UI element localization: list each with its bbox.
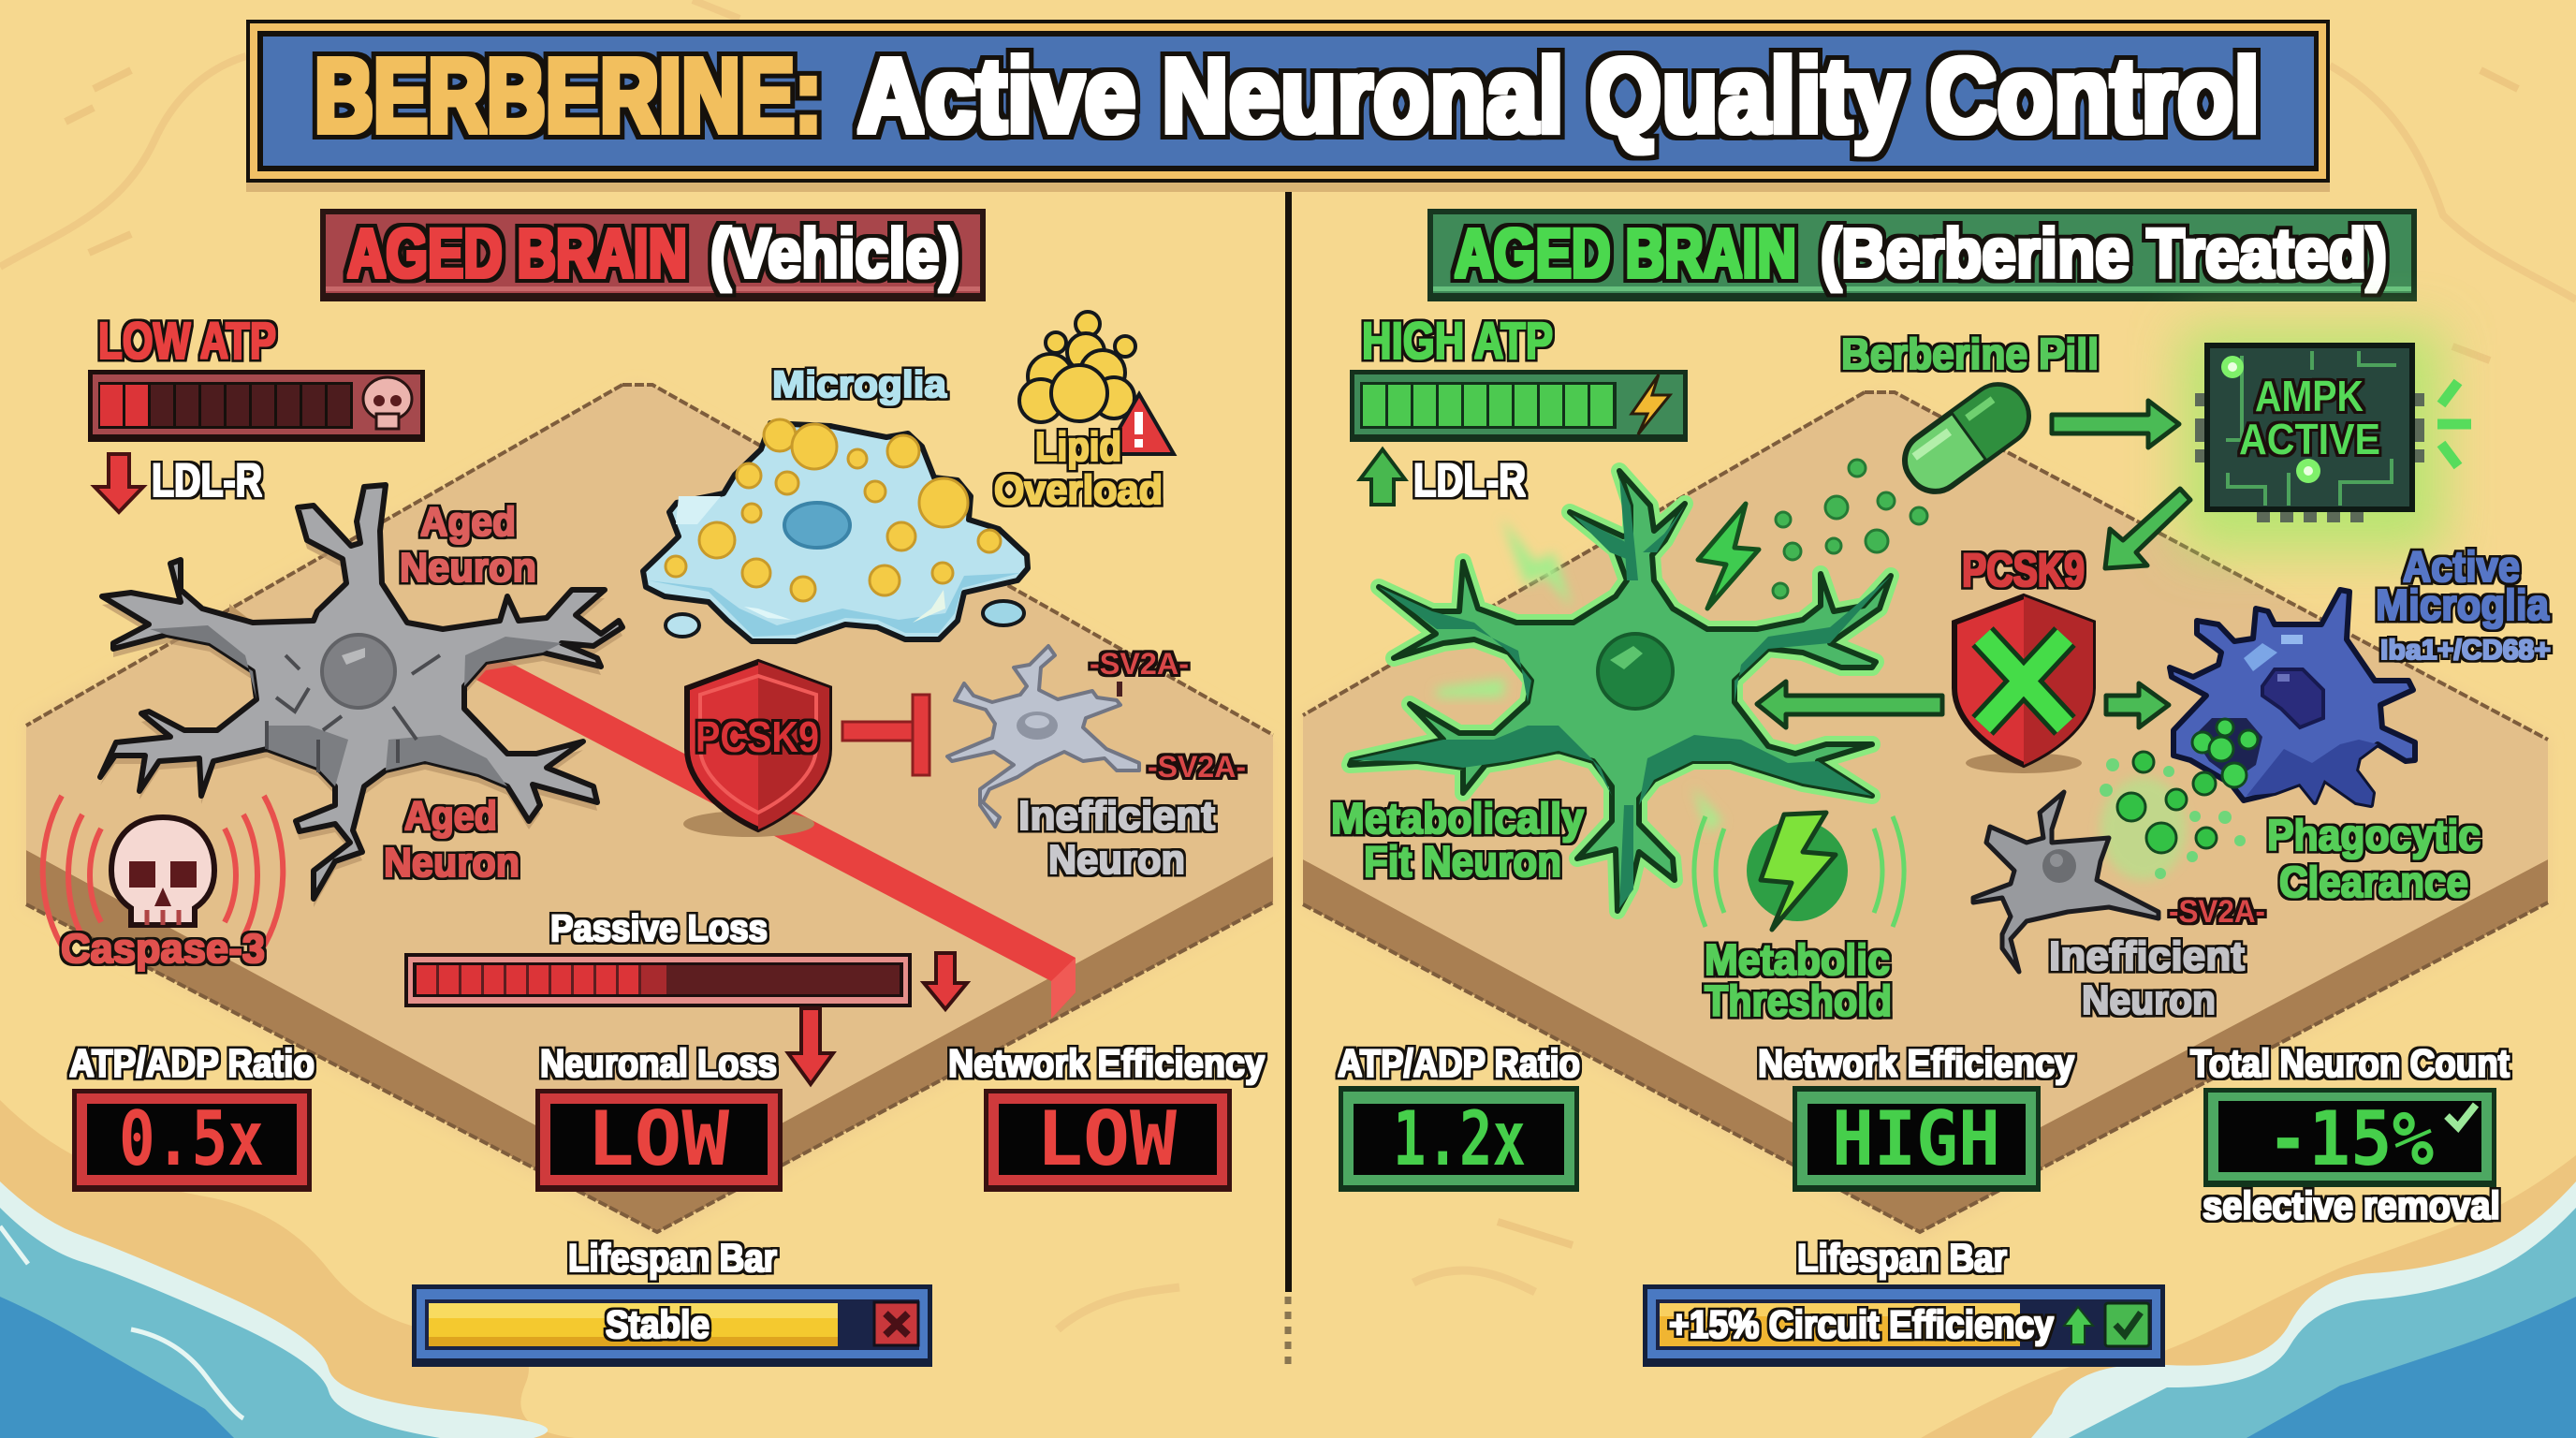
right section header <box>1427 209 2417 301</box>
metric: ATP/ADP right <box>1338 1041 1580 1192</box>
metabolic threshold label: Metabolic <box>1705 935 1890 984</box>
metric: total neuron count: Total Neuron Count <box>2190 1041 2510 1085</box>
active blue microglia <box>2170 590 2415 805</box>
right isometric platform <box>1303 392 2548 1238</box>
arrow: passive loss down <box>924 953 967 1009</box>
arrow: pill to AMPK <box>2052 401 2179 448</box>
icon: PCSK9 shield left: PCSK9 <box>695 712 819 761</box>
berberine pill label: Berberine Pill <box>1841 330 2099 378</box>
AMPK glow <box>2181 328 2443 552</box>
inefficient neuron left <box>947 646 1139 827</box>
left isometric platform <box>26 385 1273 1238</box>
high ATP label: HIGH ATP <box>1362 311 1553 370</box>
title banner: BERBERINE: <box>315 37 822 154</box>
icon: warning triangle <box>1105 394 1174 454</box>
lipid overload label: Overload <box>994 467 1163 513</box>
active microglia label <box>2376 542 2551 666</box>
icon: bolt <box>1632 374 1670 434</box>
metric: ATP/ADP right: 1.2x <box>1393 1095 1526 1182</box>
inefficient neuron label left: Neuron <box>1048 837 1185 883</box>
lipid overload label: Lipid <box>1035 424 1121 470</box>
arrow: up <box>2064 1307 2093 1344</box>
inefficient neuron label left: Inefficient <box>1018 793 1215 839</box>
lifespan bar right <box>1643 1236 2165 1367</box>
aged neuron label bottom: Aged <box>404 793 497 839</box>
phagocytic clearance label: Phagocytic <box>2267 811 2481 859</box>
lipid-laden microglia <box>643 419 1028 641</box>
microglia label: Microglia <box>772 364 947 405</box>
low ATP bar <box>88 370 425 442</box>
inefficient neuron right <box>1973 792 2159 972</box>
metric: total neuron count <box>2190 1041 2510 1187</box>
ocean right <box>2031 1181 2576 1438</box>
icon: AMPK chip: ACTIVE <box>2239 415 2380 463</box>
icon: AMPK chip: AMPK <box>2255 372 2364 420</box>
inhibition bar <box>842 695 929 775</box>
phagocytic clearance label: Clearance <box>2279 858 2468 906</box>
phagocytic clearance label <box>2267 811 2481 906</box>
icon: PCSK9 shield crossed <box>1954 596 2093 773</box>
SV2A label right: -SV2A- <box>2169 894 2265 930</box>
arrow: neuronal loss down <box>788 1008 833 1084</box>
aged neuron label top: Neuron <box>400 545 536 591</box>
passive loss label: Passive Loss <box>550 908 768 949</box>
icon: berberine pill <box>1894 374 2040 503</box>
metabolically fit label: Fit Neuron <box>1364 837 1561 886</box>
arrow: AMPK to PCSK9 <box>2105 489 2190 568</box>
icon: green bolt <box>1698 504 1759 609</box>
metric: total neuron count: -15% <box>2267 1095 2434 1182</box>
phagocytic particles <box>2100 752 2246 879</box>
icon: AMPK chip <box>2195 345 2424 522</box>
SV2A top label: -SV2A- <box>1090 647 1189 681</box>
metric: network efficiency left: LOW <box>1036 1095 1178 1182</box>
caspase-3 label: Caspase-3 <box>61 926 265 972</box>
wet sand left <box>0 1100 575 1438</box>
arrow: PCSK9 to microglia <box>2106 683 2169 727</box>
icon: metabolic threshold <box>1694 813 1904 930</box>
metric: ATP/ADP right: ATP/ADP Ratio <box>1338 1041 1580 1085</box>
left section header <box>320 209 986 301</box>
lifespan bar left: Stable <box>606 1302 710 1346</box>
metric: neuronal loss <box>535 1041 783 1192</box>
metric: network efficiency right: HIGH <box>1832 1095 2000 1182</box>
inefficient neuron label right: Inefficient <box>2049 933 2245 979</box>
lipid overload label <box>994 424 1163 513</box>
lifespan bar right: +15% Circuit Efficiency <box>1669 1302 2055 1346</box>
inefficient neuron label right <box>2049 933 2245 1023</box>
metric: ATP/ADP left: ATP/ADP Ratio <box>69 1041 315 1085</box>
LDL-R label left: LDL-R <box>152 454 262 506</box>
LDL-R label right: LDL-R <box>1413 454 1526 506</box>
icon: caspase skull with waves <box>43 796 283 955</box>
aged neuron label top <box>400 499 536 591</box>
metabolic threshold label: Threshold <box>1705 976 1892 1025</box>
icon: check mark <box>2447 1105 2476 1127</box>
metric: neuronal loss: LOW <box>587 1095 730 1182</box>
drug particles <box>1773 460 1927 598</box>
metabolically fit label <box>1331 794 1584 886</box>
passive loss bar <box>404 953 912 1007</box>
arrow: LDL-R down left <box>95 454 143 512</box>
arrow: LDL-R up right <box>1360 449 1405 505</box>
left section header: AGED BRAIN <box>347 214 687 292</box>
aged neuron label top: Aged <box>420 499 516 545</box>
lifespan bar left: Lifespan Bar <box>568 1236 777 1280</box>
PCSK9 label right: PCSK9 <box>1962 544 2085 596</box>
icon: check box <box>2105 1303 2149 1346</box>
icon: small skull <box>363 377 412 429</box>
inefficient neuron label right: Neuron <box>2082 977 2216 1023</box>
phagocytic glow <box>2100 777 2187 880</box>
active microglia label: Microglia <box>2376 580 2549 629</box>
red axon band <box>473 655 1076 1019</box>
icon: signal ticks <box>2437 382 2471 466</box>
metric: network efficiency right: Network Efficiency <box>1758 1041 2075 1085</box>
lifespan bar left <box>412 1236 932 1367</box>
ocean left <box>0 1181 548 1438</box>
metric: ATP/ADP left <box>69 1041 315 1192</box>
right section header: AGED BRAIN <box>1455 214 1796 292</box>
metric: network efficiency right <box>1758 1041 2075 1192</box>
icon: PCSK9 shield left <box>683 662 829 837</box>
low ATP label: LOW ATP <box>98 311 276 370</box>
metric: neuronal loss: Neuronal Loss <box>540 1041 777 1085</box>
right section header: (Berberine Treated) <box>1821 214 2387 292</box>
lifespan bar right: Lifespan Bar <box>1797 1236 2007 1280</box>
wet sand right <box>1907 1155 2576 1438</box>
metabolic threshold label <box>1705 935 1892 1025</box>
arrow: PCSK9 to neuron <box>1757 682 1942 727</box>
metabolically fit label: Metabolically <box>1331 794 1584 843</box>
title banner <box>246 20 2330 192</box>
icon: lipid cluster <box>1019 312 1135 422</box>
title banner: Active Neuronal Quality Control <box>857 37 2260 154</box>
high ATP bar <box>1350 370 1688 442</box>
selective removal note: selective removal <box>2203 1183 2500 1227</box>
aged neuron label bottom <box>384 793 520 886</box>
metric: network efficiency left <box>948 1041 1266 1192</box>
aged neuron label bottom: Neuron <box>384 840 520 886</box>
left section header: (Vehicle) <box>710 214 959 292</box>
active microglia label: Active <box>2403 542 2520 591</box>
center divider <box>1285 178 1292 1372</box>
metric: ATP/ADP left: 0.5x <box>119 1095 264 1182</box>
icon: X box <box>874 1302 918 1345</box>
fit green neuron <box>1350 471 1891 911</box>
SV2A lower label: -SV2A- <box>1148 750 1246 784</box>
metric: network efficiency left: Network Efficiency <box>948 1041 1266 1085</box>
active microglia label: Iba1+/CD68+ <box>2380 635 2551 666</box>
aged grey neuron <box>100 485 622 907</box>
inefficient neuron label left <box>1018 793 1215 883</box>
